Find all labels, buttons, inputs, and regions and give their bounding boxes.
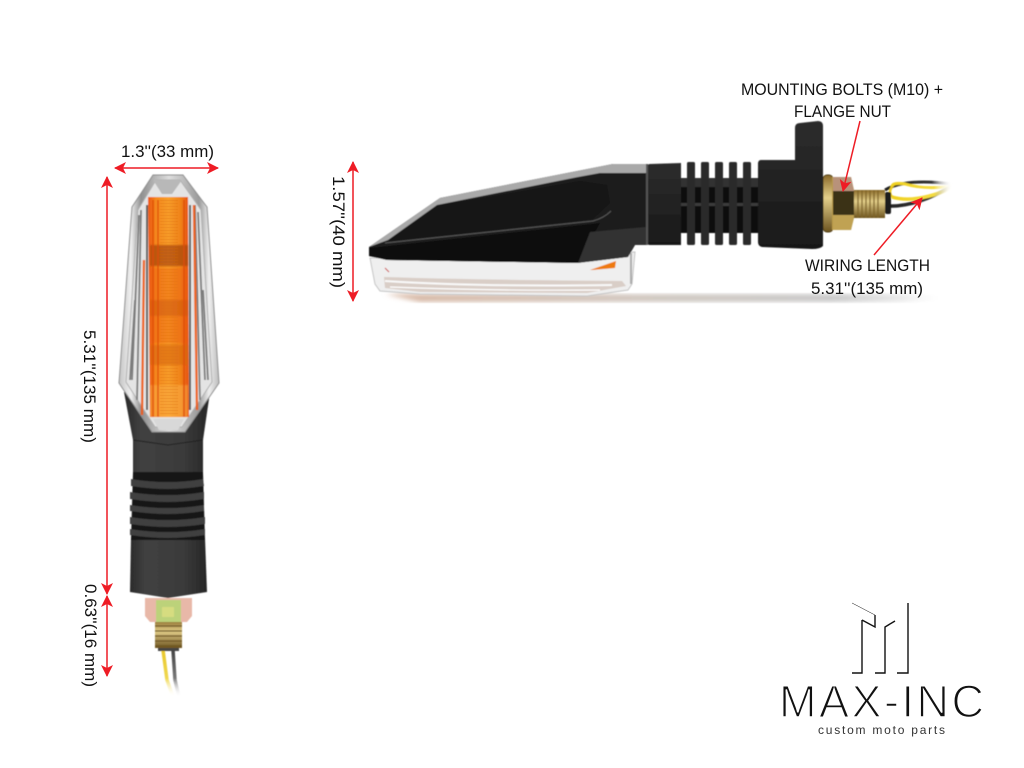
callout: wiring length: WIRING LENGTH — [805, 256, 930, 275]
dimension label: length: 5.31''(135 mm) — [80, 330, 99, 443]
logo icon — [852, 603, 908, 673]
logo tagline: custom moto parts — [818, 723, 945, 737]
threaded bolt: front view — [155, 620, 182, 651]
callout: mounting bolts: FLANGE NUT — [794, 102, 891, 121]
ground shadow — [385, 294, 945, 302]
clear lens: side view — [370, 252, 635, 296]
dimension arrow: bolt 16 mm — [106, 596, 108, 676]
wires: side view — [885, 182, 952, 206]
ribbed grip: front view — [130, 472, 205, 540]
horizontal indicator: side view — [369, 121, 952, 302]
clear lens and amber LED panel — [119, 175, 219, 432]
callout: wiring length — [805, 198, 930, 298]
amber LED panel — [142, 197, 197, 417]
dimension label: bolt: 0.63''(16 mm) — [81, 584, 100, 687]
dimension label: height: 1.57''(40 mm) — [329, 176, 348, 288]
callout: mounting bolts: MOUNTING BOLTS (M10) + — [741, 80, 943, 99]
logo wordmark: MAX-INC — [779, 676, 984, 727]
ribbed stem: side view — [680, 162, 760, 245]
housing: front view — [124, 392, 210, 598]
dimension arrow: width 33 mm — [115, 167, 218, 169]
callout: mounting bolts — [741, 80, 943, 191]
logo: MAX-INC — [779, 603, 984, 737]
mounting block with tab — [758, 121, 823, 249]
callout: wiring length: 5.31''(135 mm) — [811, 279, 923, 298]
dimension arrow: length 135 mm — [106, 177, 108, 594]
flange nut: front view — [145, 598, 192, 622]
wires: front view — [163, 650, 179, 697]
dimension arrow: height 40 mm — [352, 162, 354, 301]
stem collar — [647, 163, 681, 245]
dimension label: width: 1.3''(33 mm) — [121, 142, 214, 161]
flange nut: side view — [823, 175, 854, 232]
housing: side view — [369, 164, 648, 263]
vertical indicator: front view — [119, 175, 219, 697]
threaded bolt: side view — [854, 190, 891, 218]
